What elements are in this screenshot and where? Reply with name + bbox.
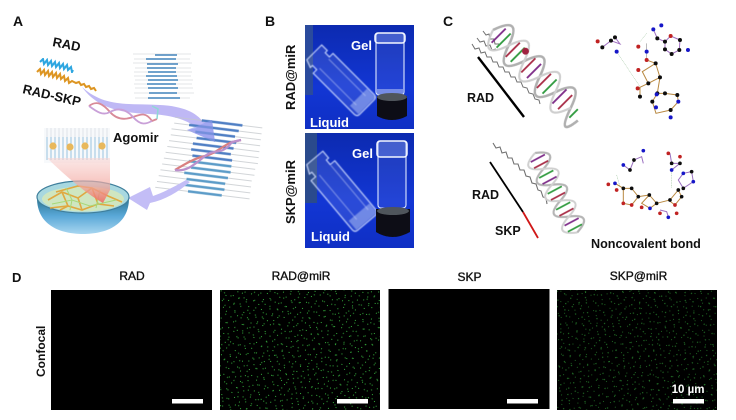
icon: RAD peptide chain: [472, 31, 540, 104]
label: RAD: RAD: [467, 91, 494, 105]
icon: bottom ligand interaction diagram: [606, 149, 695, 219]
icon: RAD peptide blue: [40, 59, 73, 72]
line: RAD span black: [490, 162, 523, 212]
upright gel vial: [376, 141, 410, 237]
row label: SKP@miR: SKP@miR: [283, 159, 298, 224]
panel label A: A: [13, 13, 23, 29]
arrow: purple ribbon to fibre assembly: [82, 87, 215, 142]
image: RAD black: [51, 290, 212, 410]
icon: inset nanofibre view: [44, 128, 110, 163]
icon: RAD-SKP peptide chain: [493, 143, 547, 204]
label: Noncovalent bond: Noncovalent bond: [591, 237, 701, 251]
arrow: overlay head on fibres: [187, 120, 215, 142]
tilted liquid vial: [301, 149, 378, 233]
icon: magnification cone: [47, 158, 110, 203]
label: RAD: RAD: [51, 34, 82, 54]
line: RAD span: [478, 57, 524, 117]
panel label C: C: [443, 13, 453, 29]
panel label B: B: [265, 13, 275, 29]
icon: RAD-SKP helix: [524, 147, 588, 238]
label: RAD-SKP: RAD-SKP: [21, 81, 83, 109]
icon: stacked fibres top: [133, 54, 194, 98]
label: SKP: SKP: [495, 224, 521, 238]
label: Gel: Gel: [351, 38, 372, 53]
panel: B vial photos: [265, 13, 414, 248]
icon: culture dish: [37, 181, 129, 234]
label: scale 10 µm: 10 µm: [672, 384, 704, 396]
upright gel vial: [375, 33, 407, 120]
heading: SKP@miR: SKP@miR: [610, 269, 668, 283]
photo: RAD@miR vials: [303, 25, 414, 130]
label: Agomir: Agomir: [113, 130, 158, 145]
heading: SKP: SKP: [457, 270, 482, 284]
panel: A schematic: [13, 13, 262, 234]
panel label D: D: [12, 270, 21, 285]
heading: RAD: RAD: [119, 269, 145, 283]
icon: helix across fibres: [175, 140, 241, 170]
heading: RAD@miR: RAD@miR: [272, 269, 331, 283]
image: RAD@miR green puncta: [220, 290, 380, 410]
image: SKP@miR green puncta: [557, 290, 717, 410]
row label: Confocal: Confocal: [34, 326, 48, 377]
arrow: lavender to dish: [128, 180, 190, 210]
label: Gel: Gel: [352, 146, 373, 161]
label: Liquid: Liquid: [310, 115, 349, 130]
line: SKP span red: [523, 212, 538, 238]
photo: SKP@miR vials: [301, 133, 414, 248]
panel: D confocal images: [12, 269, 717, 410]
image: SKP black: [388, 289, 550, 409]
icon: peptide fibres with helix: [155, 116, 262, 199]
icon: top ligand interaction diagram: [596, 23, 690, 119]
panel: C molecular docking: [443, 13, 701, 251]
tilted liquid vial: [303, 44, 377, 117]
label: RAD: RAD: [472, 188, 499, 202]
label: Liquid: Liquid: [311, 229, 350, 244]
icon: short microRNA helix: [89, 103, 158, 124]
icon: RAD-SKP peptide orange: [37, 69, 96, 91]
row label: RAD@miR: RAD@miR: [283, 44, 298, 110]
icon: RAD helix: [481, 19, 592, 130]
